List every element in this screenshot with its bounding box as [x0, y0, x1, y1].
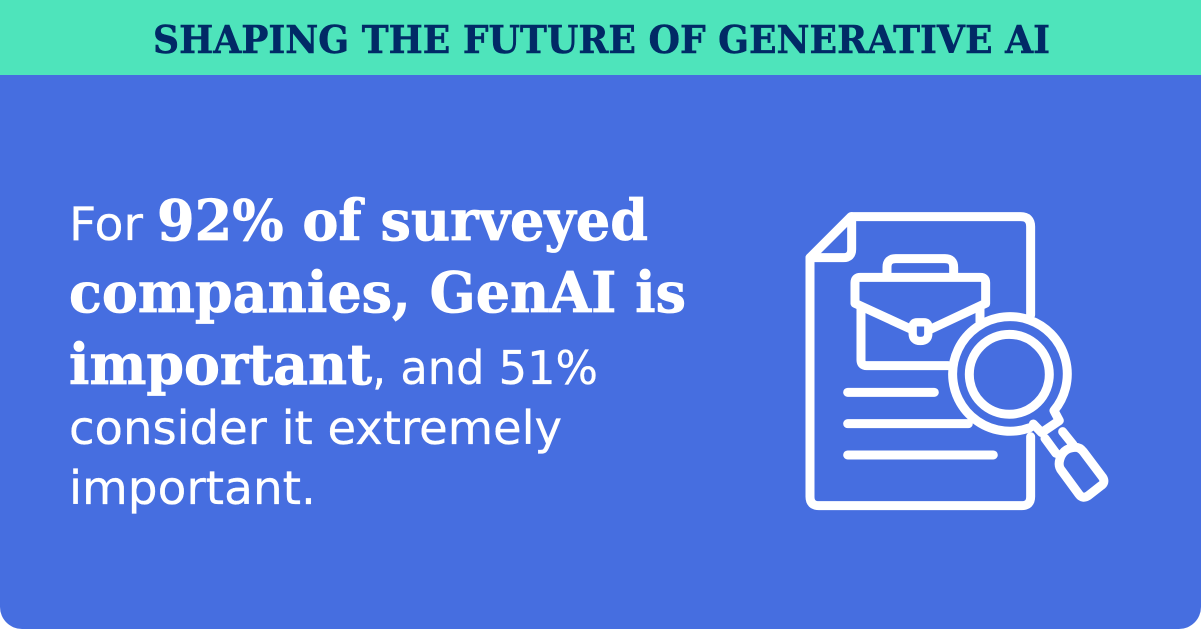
icon: magnifying glass [953, 317, 1104, 497]
text block: statistic: important [69, 332, 372, 398]
title: SHAPING THE FUTURE OF GENERATIVE AI [153, 17, 1050, 62]
text block: statistic: , and 51% [372, 341, 598, 395]
text block: statistic: companies, GenAI is [69, 260, 686, 326]
text block: statistic: important. [69, 461, 316, 515]
text block: statistic: consider it extremely [69, 401, 562, 455]
icon: page fold [810, 217, 852, 258]
icon: text lines [848, 392, 993, 455]
header band [0, 0, 1201, 75]
text block: statistic: 92% of surveyed [157, 188, 648, 254]
icon: document outline [810, 217, 1031, 506]
icon: document with briefcase and magnifying glass [810, 217, 1104, 506]
text block: statistic [69, 188, 686, 515]
icon: briefcase [855, 259, 986, 366]
text block: statistic: For [69, 197, 143, 251]
